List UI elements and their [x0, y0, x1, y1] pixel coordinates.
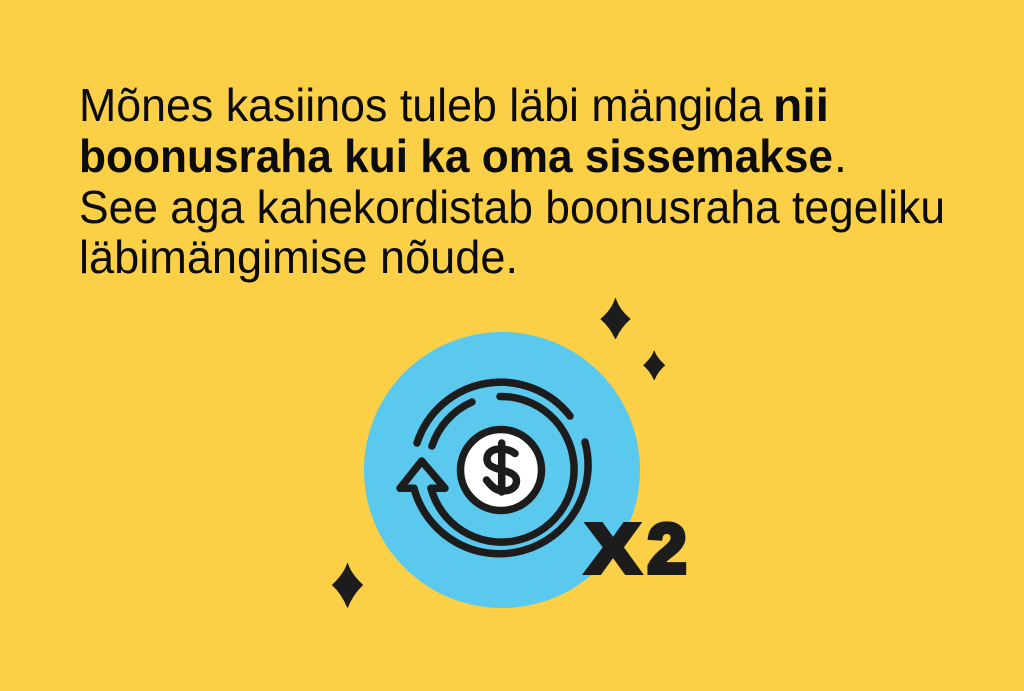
text block: explanation: .: [834, 130, 847, 182]
text block: explanation: läbimängimise nõude.: [79, 231, 518, 283]
text block: explanation: Mõnes kasiinos tuleb läbi mängida: [79, 79, 763, 131]
outer arc bottom: [414, 442, 588, 554]
arrow head: [400, 461, 445, 488]
icon: lower sparkle: [332, 564, 362, 607]
icon: small sparkle: [644, 351, 665, 380]
text block: explanation: nii: [773, 79, 829, 131]
inner arc: [431, 396, 574, 542]
label: X2: [586, 510, 686, 588]
icon: large sparkle: [601, 298, 630, 338]
coin: [460, 430, 542, 510]
text block: explanation: See aga kahekordistab boonusraha tegeliku: [79, 181, 945, 233]
small inner arc: [432, 402, 472, 446]
outer arc top: [417, 382, 570, 443]
text block: explanation: boonusraha kui ka oma sissemakse: [79, 130, 833, 182]
label: X2: X: [586, 510, 640, 588]
icon: circular arrows with dollar coin: [400, 382, 588, 554]
blue circle: [364, 332, 640, 608]
text block: explanation: [79, 79, 945, 283]
label: X2: 2: [648, 510, 686, 588]
dollar sign: [486, 443, 516, 492]
